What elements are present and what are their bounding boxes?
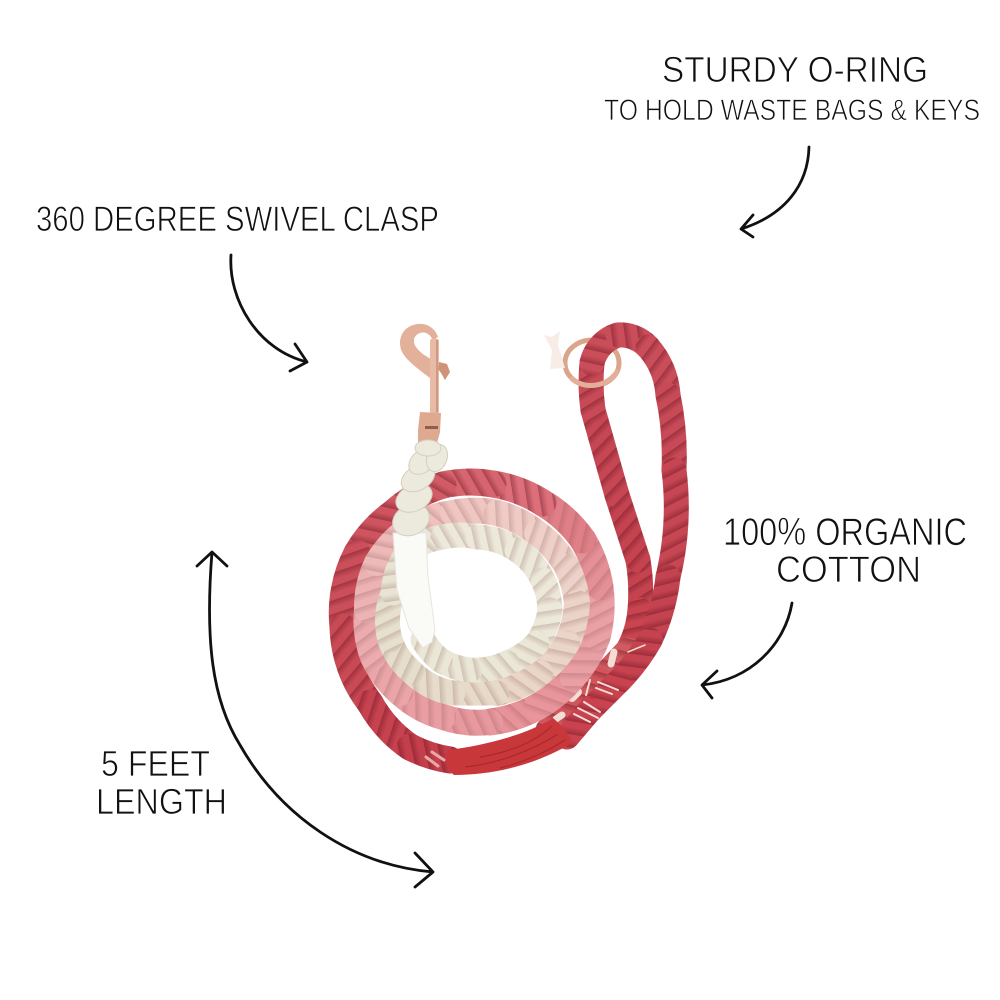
o-ring, lower arc over rope [572, 372, 617, 385]
white whipped wrap [393, 533, 435, 648]
arrow: to o-ring [741, 147, 809, 237]
text: organic cotton callout [723, 511, 967, 590]
illustration: coiled ombre rope leash [342, 324, 676, 775]
text: 5 feet length callout: LENGTH [96, 781, 227, 822]
text: organic cotton callout: COTTON [776, 549, 921, 590]
small hang tag [544, 331, 565, 369]
clasp swivel base [418, 412, 441, 443]
clasp thumb stud [438, 362, 450, 380]
outer coil: red to pink [342, 482, 601, 760]
text: sturdy o-ring callout: STURDY O-RING [662, 49, 928, 90]
swivel clasp [400, 324, 450, 443]
clasp hook [400, 324, 438, 378]
clasp swivel slot [425, 426, 438, 429]
text: sturdy o-ring callout [604, 49, 980, 127]
arrow: to swivel clasp [231, 255, 307, 371]
text: 5 feet length callout [96, 743, 227, 822]
inner coil: cream [388, 535, 550, 693]
cream rope end knot [387, 440, 451, 542]
middle coil: pink to blush [366, 511, 577, 723]
red thread wrap [426, 718, 572, 775]
clasp shaft [430, 339, 439, 414]
arrow: double-headed length arrow [197, 552, 433, 887]
arrow: to cotton rope [702, 603, 792, 698]
rope splice with pale fibres [556, 645, 645, 722]
o-ring, upper arc behind rope [565, 340, 619, 386]
text: 5 feet length callout: 5 FEET [101, 743, 210, 784]
text: 360 degree swivel clasp callout: 360 DEGREE SWIVEL CLASP [36, 200, 439, 239]
handle loop rope [548, 335, 676, 737]
